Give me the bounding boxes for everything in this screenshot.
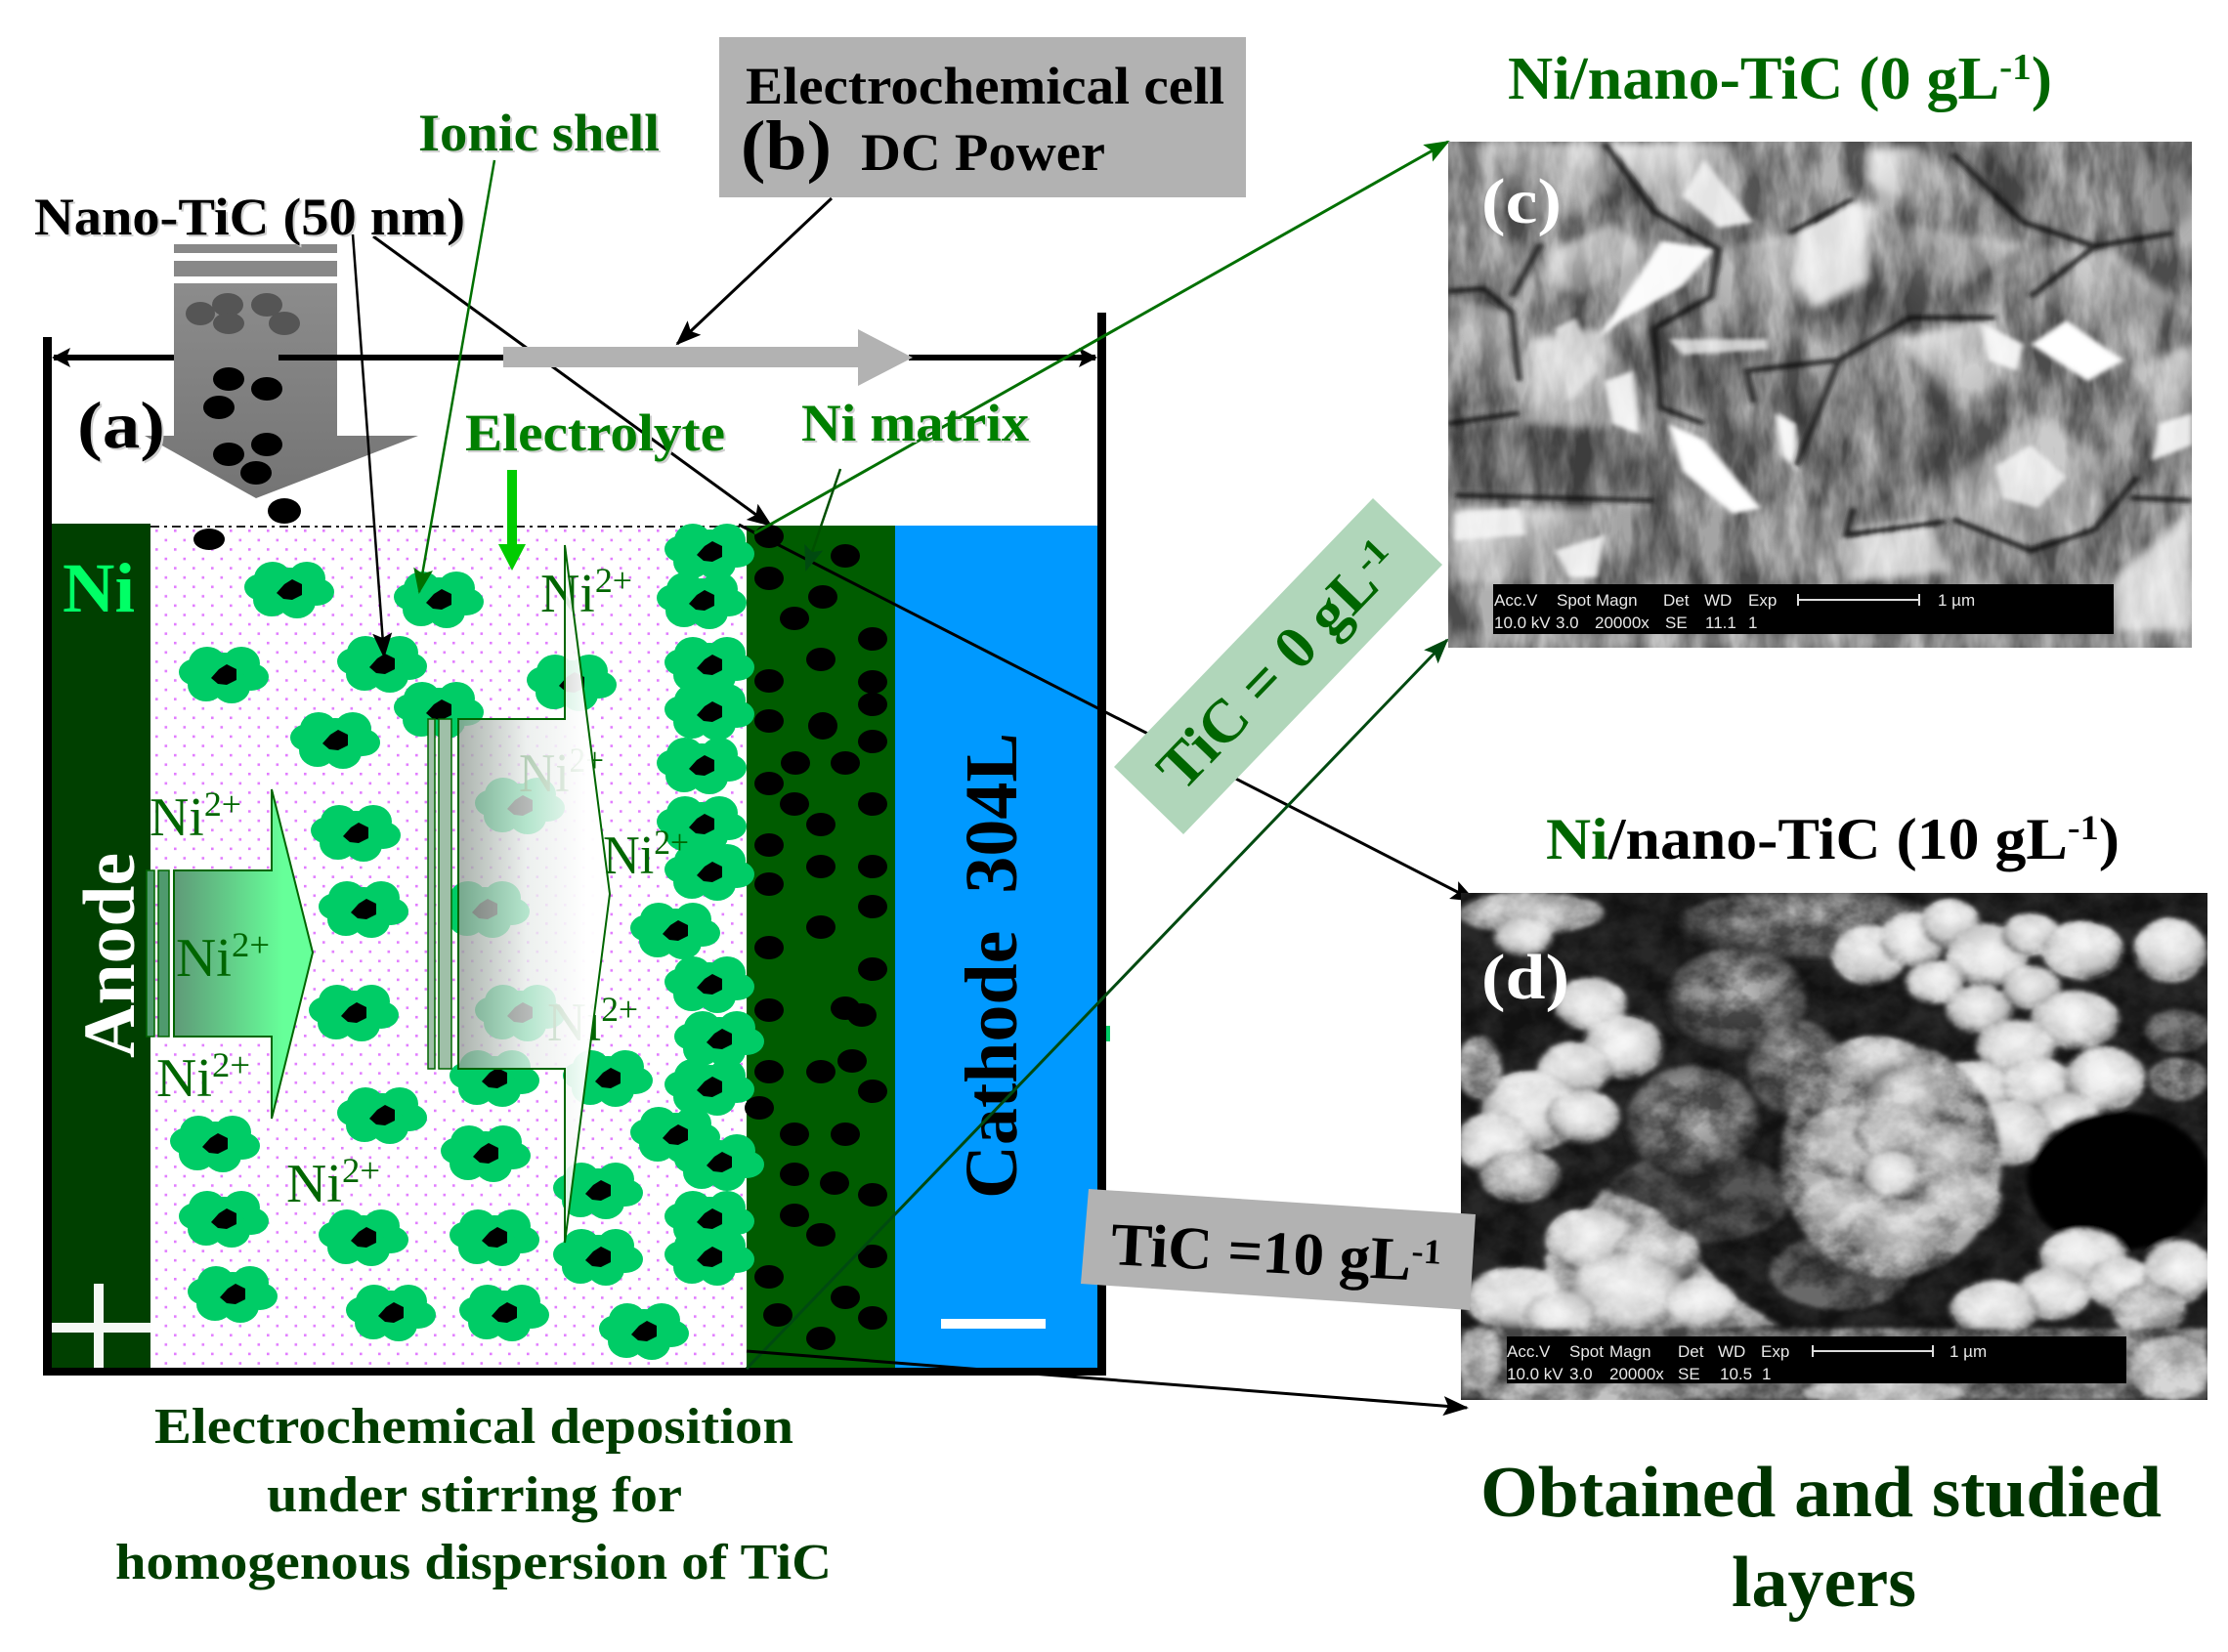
heading: obtained and studied layers: [1480, 1453, 2162, 1623]
SEM data bar c: 11.1: [1705, 614, 1736, 632]
TiC particles falling: [186, 293, 301, 550]
Anode label: Anode: [69, 853, 150, 1058]
pointer line from DC power box: [677, 198, 832, 344]
Ni2+ labels in electrolyte: [150, 561, 689, 1214]
Cathode label: Cathode 304L: [951, 733, 1033, 1199]
(c) marker: (c): [1481, 166, 1562, 237]
label: TiC = 0 g/L: TiC = 0 gL: [1144, 555, 1388, 803]
title: Ni/nano-TiC 0 g/L: Ni/nano-TiC (0 gL: [1508, 46, 1985, 112]
SEM data bar d: WD: [1718, 1342, 1745, 1361]
label: TiC = 0 g/L: [1114, 498, 1442, 834]
anode Ni plate: [52, 524, 150, 1370]
DC power gray arrow: [503, 329, 913, 386]
plus sign on anode: [52, 1284, 150, 1368]
SEM data bar c: Exp: [1748, 591, 1777, 610]
pointer line from Ni matrix label: [806, 469, 840, 570]
Ni2+ labels in electrolyte: Ni: [150, 787, 204, 848]
DC Power text: DC Power: [861, 123, 1105, 182]
Ni anode label: Ni: [63, 549, 135, 627]
electrolyte down arrow: [498, 470, 526, 571]
(b) marker: (b): [741, 106, 832, 185]
Nano-TiC feeding arrow: [145, 244, 418, 550]
Ni2+ labels in electrolyte: Ni: [156, 1048, 211, 1109]
SEM data bar c: 10.0 kV: [1494, 614, 1551, 632]
TiC particles embedded in Ni matrix: [745, 525, 887, 1350]
small green artifact: [1106, 1026, 1110, 1041]
title: Ni/nano-TiC 0 g/L: ): [2032, 46, 2052, 112]
title: Ni/nano-TiC 10 g/L: -1: [2068, 808, 2099, 847]
SEM data bar c: Det: [1663, 591, 1690, 610]
panel c: SEM micrograph 0 g/L: [1448, 142, 2192, 649]
SEM data bar d: 10.5: [1720, 1365, 1752, 1383]
Electrolyte label: Electrolyte: [465, 403, 725, 462]
label: TiC = 10 g/L: [1081, 1189, 1476, 1310]
SEM data bar d: 1 µm: [1950, 1342, 1987, 1361]
SEM data bar c: 20000x: [1595, 614, 1650, 632]
caption: electrochemical deposition: [115, 1399, 832, 1590]
Ni2+ labels in electrolyte: 2+: [595, 561, 632, 600]
label: TiC = 10 g/L: TiC =10 gL: [1109, 1211, 1408, 1293]
(a) marker: (a): [77, 388, 165, 462]
heading: obtained and studied layers: layers: [1732, 1543, 1916, 1623]
Ionic shell label: Ionic shell: [418, 104, 660, 162]
SEM data bar d: Exp: [1761, 1342, 1789, 1361]
SEM data bar d: 20000x: [1609, 1365, 1664, 1383]
minus sign on cathode: [941, 1319, 1046, 1329]
SEM data bar c: Magn: [1596, 591, 1638, 610]
ionic shell TiC particles in electrolyte: [170, 524, 764, 1360]
Ni matrix layer: [747, 526, 895, 1370]
SEM data bar c: Acc.V: [1494, 591, 1538, 610]
SEM data bar d: Det: [1678, 1342, 1704, 1361]
Nano-TiC label: Nano-TiC (50 nm): [34, 188, 465, 246]
Ni2+ labels in electrolyte: 2+: [204, 784, 241, 824]
heading: obtained and studied layers: Obtained and studied: [1480, 1453, 2162, 1533]
panel a: electrochemical cell: [43, 142, 1475, 1408]
SEM data bar d: Spot: [1569, 1342, 1604, 1361]
Ni2+ labels in electrolyte: Ni: [519, 743, 574, 804]
pointer line from matrix base to panel c: [747, 640, 1447, 1369]
block arrow: Ni2+ flow from anode: 2+: [232, 925, 270, 964]
Ni matrix label: Ni matrix: [801, 394, 1029, 452]
(d) marker: (d): [1481, 942, 1569, 1013]
cell walls: [43, 313, 1106, 1376]
title: Ni/nano-TiC 10 g/L: ): [2099, 807, 2120, 871]
caption: electrochemical deposition: Electrochemical deposition: [154, 1399, 793, 1455]
pointer line from matrix base to panel d: [747, 1351, 1467, 1408]
SEM data bar c: WD: [1704, 591, 1732, 610]
DC current double arrow line: [52, 348, 1097, 367]
Ni2+ labels in electrolyte: Ni: [540, 564, 595, 624]
title: Ni/nano-TiC 0 g/L: -1: [1999, 47, 2032, 88]
cathode 304L: [895, 526, 1097, 1370]
SEM data bar d: 3.0: [1569, 1365, 1593, 1383]
Ni2+ labels in electrolyte: Ni: [286, 1154, 341, 1214]
SEM data bar d: 10.0 kV: [1507, 1365, 1564, 1383]
electrolyte dotted region: [150, 527, 747, 1368]
Ni2+ labels in electrolyte: 2+: [570, 741, 604, 780]
caption: electrochemical deposition: under stirring for: [267, 1467, 682, 1523]
SEM data bar c: SE: [1665, 614, 1688, 632]
SEM data bar c: 1 µm: [1938, 591, 1975, 610]
SEM data bar d: 1: [1762, 1365, 1771, 1383]
green pointer line to SEM panel c: [754, 142, 1448, 533]
Ni2+ labels in electrolyte: 2+: [654, 823, 689, 862]
block arrow: Ni2+ flow from anode: Ni: [176, 928, 231, 989]
caption: electrochemical deposition: homogenous dispersion of TiC: [115, 1535, 832, 1590]
Ni2+ labels in electrolyte: Ni: [603, 826, 658, 886]
block arrow: Ni2+ flow from anode: [147, 789, 313, 1119]
Ni2+ labels in electrolyte: 2+: [342, 1151, 380, 1190]
title: Ni/nano-TiC 10 g/L: Ni/nano-TiC (10 gL: [1546, 807, 2040, 871]
SEM data bar d: Acc.V: [1507, 1342, 1551, 1361]
panel b: DC power label box: [719, 37, 1246, 197]
label: TiC = 10 g/L: -1: [1411, 1231, 1442, 1272]
block arrow: faded stirring flow: [428, 545, 610, 1243]
Ni2+ labels in electrolyte: 2+: [212, 1045, 250, 1084]
panel d: SEM micrograph 10 g/L: [1457, 889, 2213, 1407]
electrolyte surface line: [150, 526, 747, 528]
SEM data bar c: 3.0: [1556, 614, 1579, 632]
SEM data bar c: [1493, 584, 2114, 634]
Ni2+ labels in electrolyte: 2+: [601, 990, 638, 1029]
SEM data bar d: [1507, 1336, 2126, 1383]
pointer lines from Nano-TiC label: [353, 234, 771, 657]
label: TiC = 0 g/L: -1: [1346, 530, 1396, 581]
pointer line from ionic shell label: [419, 160, 494, 592]
SEM data bar d: SE: [1678, 1365, 1700, 1383]
SEM data bar d: Magn: [1609, 1342, 1651, 1361]
Ni2+ labels in electrolyte: Ni: [547, 993, 602, 1053]
pointer line to SEM panel d: [739, 525, 1475, 901]
Electrochemical cell text: Electrochemical cell: [746, 57, 1224, 115]
SEM data bar c: 1: [1748, 614, 1757, 632]
SEM data bar c: Spot: [1557, 591, 1591, 610]
